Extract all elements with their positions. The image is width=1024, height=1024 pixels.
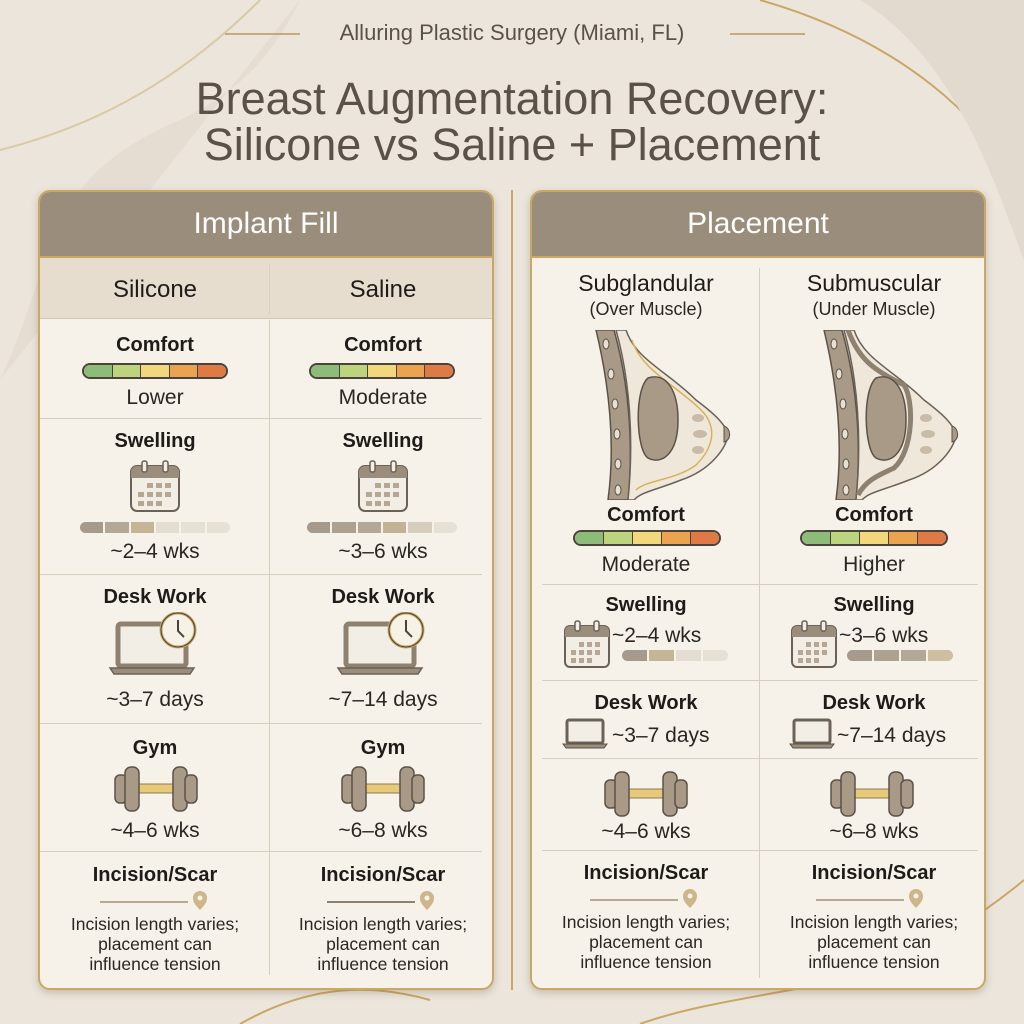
row: gym silicone	[110, 737, 200, 842]
subheader: silicone / saline: Silicone	[113, 276, 197, 303]
icon: scar line with pin	[100, 891, 207, 910]
row: desk work silicone	[103, 586, 206, 711]
row: comfort saline: Moderate	[339, 386, 427, 409]
row: swelling submuscular: ~3–6 wks	[839, 624, 928, 647]
row: gym submuscular	[829, 771, 919, 843]
row: desk work submuscular	[789, 692, 946, 748]
row: comfort silicone	[82, 334, 228, 409]
row: swelling subglandular: ~2–4 wks	[612, 624, 701, 647]
center divider	[511, 190, 513, 990]
row: swelling silicone: Swelling	[114, 430, 196, 452]
row: incision saline: placement can	[326, 934, 440, 954]
row: incision subglandular: Incision length varies;	[562, 912, 730, 932]
heading: placement: Placement	[687, 207, 829, 240]
row: incision submuscular: Incision length varies;	[790, 912, 958, 932]
icon: laptop with clock	[336, 612, 424, 675]
row: swelling saline: ~3–6 wks	[338, 540, 428, 563]
row: desk work submuscular: Desk Work	[822, 692, 926, 714]
panel: placement	[530, 190, 986, 990]
row: incision submuscular: influence tension	[808, 952, 940, 972]
illustration: implant under muscle	[823, 330, 958, 500]
row: incision silicone: Incision/Scar	[93, 864, 217, 886]
subheader: silicone / saline	[40, 258, 496, 319]
row: incision silicone	[71, 864, 239, 974]
row: gym subglandular: ~4–6 wks	[601, 820, 691, 843]
icon: dumbbell	[830, 771, 914, 817]
comfort rating: moderate	[573, 504, 721, 576]
icon: dumbbell	[604, 771, 688, 817]
row: desk work subglandular: Desk Work	[594, 692, 698, 714]
row: incision submuscular: Incision/Scar	[812, 862, 936, 884]
comfort rating: moderate: Comfort	[607, 504, 685, 526]
comfort rating: higher: Higher	[843, 553, 905, 576]
icon: calendar	[358, 460, 408, 512]
row: desk work saline: ~7–14 days	[328, 688, 438, 711]
row: incision saline: Incision/Scar	[321, 864, 445, 886]
row: gym silicone: Gym	[133, 737, 177, 759]
column: subglandular: (Over Muscle)	[589, 299, 702, 319]
row: desk work submuscular: ~7–14 days	[837, 724, 946, 747]
row: gym saline	[338, 737, 428, 842]
row: swelling subglandular	[564, 594, 728, 668]
row: comfort saline	[309, 334, 455, 409]
row: incision submuscular	[790, 862, 958, 972]
title	[196, 73, 828, 170]
subheader: silicone / saline: Saline	[350, 276, 416, 303]
icon: calendar	[791, 620, 837, 668]
row: incision silicone: influence tension	[89, 954, 221, 974]
row: incision submuscular: placement can	[817, 932, 931, 952]
comfort rating: higher: Comfort	[835, 504, 913, 526]
row: desk work saline	[328, 586, 438, 711]
row: swelling saline: Swelling	[342, 430, 424, 452]
icon: scar line with pin	[816, 888, 926, 910]
comfort rating: higher	[800, 504, 948, 576]
row: swelling submuscular	[791, 594, 953, 668]
row: comfort silicone: Lower	[126, 386, 184, 409]
row: incision subglandular: influence tension	[580, 952, 712, 972]
column: submuscular: (Under Muscle)	[812, 299, 936, 319]
row: gym silicone: ~4–6 wks	[110, 819, 200, 842]
subheading: subglandular: Subglandular	[578, 270, 714, 296]
icon: laptop	[789, 718, 835, 748]
title: Silicone vs Saline + Placement	[204, 119, 820, 170]
row: incision subglandular: placement can	[589, 932, 703, 952]
icon: scar line with pin	[590, 889, 697, 908]
icon: calendar	[130, 460, 180, 512]
subheading: submuscular: Submuscular	[807, 270, 941, 296]
row: gym submuscular: ~6–8 wks	[829, 820, 919, 843]
row: incision silicone: Incision length varies;	[71, 914, 239, 934]
row: incision saline: Incision length varies;	[299, 914, 467, 934]
icon: scar line with pin	[327, 891, 434, 910]
row: swelling silicone	[80, 430, 230, 563]
column: submuscular	[800, 270, 958, 576]
row: incision silicone: placement can	[98, 934, 212, 954]
row: swelling subglandular: Swelling	[605, 594, 687, 616]
title: Breast Augmentation Recovery:	[196, 73, 828, 124]
row: desk work silicone: ~3–7 days	[106, 688, 204, 711]
column: subglandular	[573, 270, 730, 576]
heading: implant fill	[40, 192, 492, 258]
row: gym saline: Gym	[361, 737, 405, 759]
row: gym saline: ~6–8 wks	[338, 819, 428, 842]
row: comfort silicone: Comfort	[116, 334, 194, 356]
row: desk work subglandular	[562, 692, 710, 748]
icon: dumbbell	[114, 766, 198, 812]
comfort rating: moderate: Moderate	[602, 553, 690, 576]
row: desk work silicone: Desk Work	[103, 586, 206, 608]
icon: calendar	[564, 620, 610, 668]
icon: laptop with clock	[108, 612, 196, 675]
row: incision subglandular: Incision/Scar	[584, 862, 708, 884]
row: incision saline	[299, 864, 467, 974]
heading: placement	[532, 192, 984, 258]
row: incision saline: influence tension	[317, 954, 449, 974]
row: gym subglandular	[601, 771, 691, 843]
illustration: implant over muscle	[595, 330, 730, 500]
icon: dumbbell	[341, 766, 425, 812]
row: incision subglandular	[562, 862, 730, 972]
row: swelling submuscular: Swelling	[833, 594, 915, 616]
panel: implant fill	[38, 190, 494, 990]
row: comfort saline: Comfort	[344, 334, 422, 356]
subtitle: clinic name: Alluring Plastic Surgery (Miami, FL)	[340, 20, 684, 45]
heading: implant fill: Implant Fill	[193, 207, 339, 240]
row: desk work saline: Desk Work	[331, 586, 434, 608]
row: swelling saline	[307, 430, 457, 563]
icon: laptop	[562, 718, 608, 748]
row: swelling silicone: ~2–4 wks	[110, 540, 200, 563]
row: desk work subglandular: ~3–7 days	[612, 724, 710, 747]
